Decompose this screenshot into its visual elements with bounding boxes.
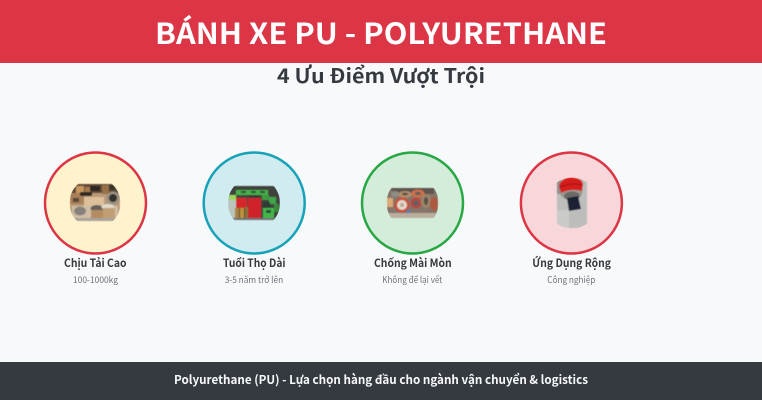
- panel: Chống Mài Mòn: [362, 152, 463, 286]
- icon circle: high load: [45, 152, 146, 254]
- label: Chống Mài Mòn: [374, 255, 452, 271]
- icon circle: abrasion resistant: [362, 152, 463, 254]
- subtitle: 4 Ưu Điểm Vượt Trội: [277, 60, 485, 89]
- value: 100-1000kg: [73, 273, 118, 286]
- value: 3-5 năm trở lên: [225, 273, 283, 286]
- photo: red caster wheel: [557, 178, 587, 228]
- value: Công nghiệp: [547, 273, 596, 286]
- icon circle: wide application: [521, 152, 622, 254]
- header banner: [0, 0, 762, 63]
- panel: Tuổi Thọ Dài: [204, 152, 305, 286]
- photo: red and green wheels: [228, 186, 280, 220]
- icon circle: long life: [204, 152, 305, 254]
- value: Không để lại vết: [382, 273, 443, 286]
- label: Tuổi Thọ Dài: [223, 255, 286, 271]
- photo: tan PU wheels: [70, 184, 120, 221]
- photo: worn orange wheels: [387, 188, 438, 218]
- title: BÁNH XE PU - POLYURETHANE: [155, 11, 607, 53]
- panel: Chịu Tải Cao: [45, 152, 146, 286]
- footer text: Polyurethane (PU) - Lựa chọn hàng đầu cho ngành vận chuyển & logistics: [174, 371, 588, 388]
- panel: Ứng Dụng Rộng: [521, 152, 622, 286]
- label: Chịu Tải Cao: [64, 255, 127, 271]
- label: Ứng Dụng Rộng: [532, 255, 611, 271]
- footer bar: [0, 362, 762, 400]
